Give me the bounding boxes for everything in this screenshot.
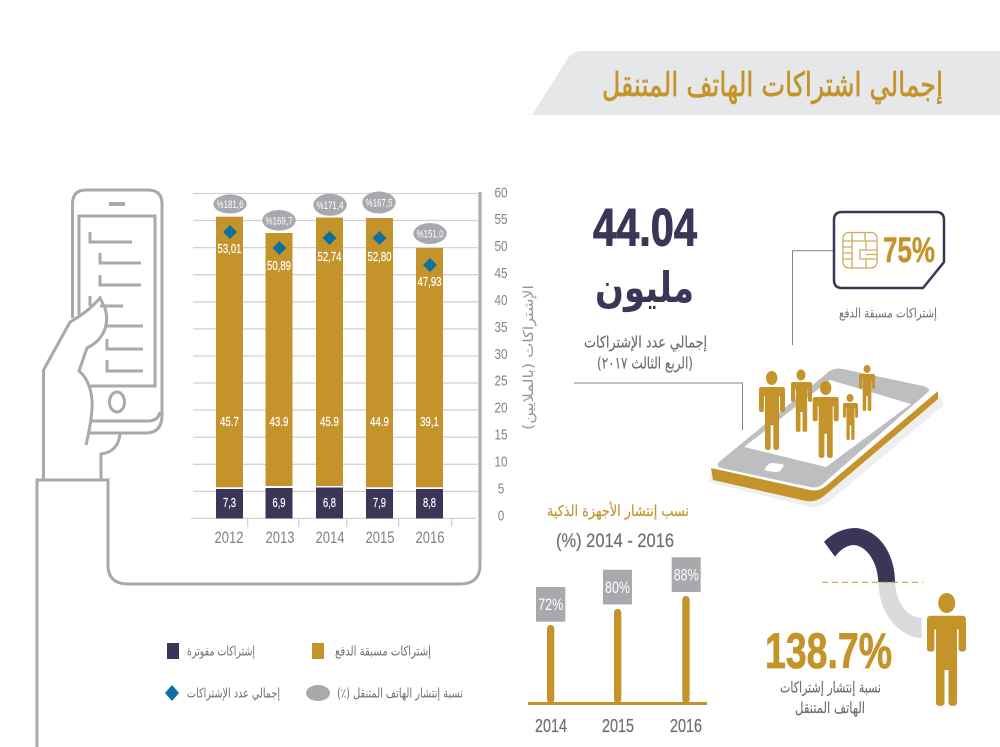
arc gauge bbox=[822, 528, 923, 638]
legend bbox=[165, 643, 463, 702]
total subscriptions figure: إجمالي عدد الإشتراكات bbox=[584, 332, 707, 352]
person bbox=[791, 370, 812, 432]
chart gridlines bbox=[191, 194, 478, 527]
bar values: 53,01 bbox=[218, 242, 242, 256]
smart device penetration chart: 80% bbox=[605, 578, 630, 597]
penetration values: %167,5 bbox=[366, 198, 392, 210]
y axis numbers: 30 bbox=[494, 346, 508, 363]
person bbox=[759, 371, 785, 450]
x axis years: 2015 bbox=[366, 529, 394, 547]
person bbox=[843, 394, 858, 440]
connector lines bbox=[574, 251, 833, 430]
legend: إشتراكات مفوترة bbox=[187, 644, 255, 660]
y axis numbers: 35 bbox=[494, 319, 508, 336]
total subscriptions figure bbox=[584, 199, 707, 374]
bar values: 45.9 bbox=[320, 415, 339, 429]
bar values: 39,1 bbox=[420, 415, 439, 429]
penetration values: %181,6 bbox=[216, 199, 244, 211]
y axis numbers: 15 bbox=[494, 427, 508, 444]
bar values: 50,89 bbox=[267, 259, 291, 273]
total subscriptions figure: 44.04 bbox=[593, 199, 697, 258]
smart device penetration chart bbox=[528, 501, 707, 736]
years bbox=[535, 716, 702, 736]
stacked bar chart bbox=[191, 184, 537, 547]
mobile penetration figure: 138.7% bbox=[765, 623, 892, 679]
icon: hand holding phone with frame bbox=[37, 190, 480, 747]
penetration values: %171,4 bbox=[316, 200, 344, 212]
total subscriptions figure: مليون bbox=[595, 263, 694, 313]
y axis numbers: 40 bbox=[494, 292, 508, 309]
total subscriptions figure: (الربع الثالث ٢٠١٧) bbox=[597, 354, 693, 374]
icon: sim chip bbox=[843, 232, 877, 268]
legend: إجمالي عدد الإشتراكات bbox=[187, 686, 280, 702]
y axis numbers: 25 bbox=[494, 373, 508, 390]
years: 2014 bbox=[535, 716, 567, 736]
smart device penetration chart: 88% bbox=[674, 566, 699, 584]
postpaid bars bbox=[216, 488, 443, 518]
icon: person bbox=[927, 593, 966, 706]
bar values: 52,74 bbox=[318, 250, 342, 264]
legend: إشتراكات مسبقة الدفع bbox=[335, 644, 431, 660]
bar values: 47,93 bbox=[418, 275, 442, 289]
title banner bbox=[532, 51, 1000, 115]
smart device penetration chart: نسب إنتشار الأجهزة الذكية bbox=[547, 501, 689, 520]
mobile penetration figure: نسبة إنتشار إشتراكات bbox=[780, 678, 881, 696]
mobile penetration figure: الهاتف المتنقل bbox=[795, 699, 865, 717]
y axis numbers bbox=[494, 184, 508, 524]
bar values: 44.9 bbox=[370, 415, 389, 429]
bar values: 8,8 bbox=[423, 496, 436, 510]
smart device penetration chart: 72% bbox=[538, 595, 563, 614]
sim card callout: 75% bbox=[883, 231, 935, 270]
bar values: 7,9 bbox=[373, 496, 386, 510]
person bbox=[859, 365, 875, 411]
sim outline bbox=[834, 212, 944, 288]
prepaid bars bbox=[216, 217, 443, 487]
bar values: 7,3 bbox=[223, 496, 236, 510]
penetration ellipses bbox=[213, 192, 447, 244]
years: 2016 bbox=[670, 716, 702, 736]
y axis numbers: 45 bbox=[494, 265, 508, 282]
penetration values: %169,7 bbox=[266, 215, 292, 227]
y axis numbers: 10 bbox=[494, 454, 508, 470]
years: 2015 bbox=[602, 716, 634, 736]
value boxes bbox=[536, 557, 701, 622]
penetration values bbox=[216, 198, 444, 240]
bar values: 43.9 bbox=[270, 415, 289, 429]
x axis years: 2013 bbox=[266, 529, 294, 547]
sim card callout bbox=[834, 212, 944, 322]
sim card callout: إشتراكات مسبقة الدفع bbox=[839, 306, 937, 322]
bar values: 6,8 bbox=[323, 496, 336, 510]
x axis years bbox=[214, 529, 444, 547]
y axis numbers: 5 bbox=[498, 480, 504, 497]
mobile penetration figure bbox=[765, 528, 966, 717]
lollipop bars bbox=[528, 596, 707, 705]
total diamonds bbox=[223, 225, 437, 272]
bar values bbox=[218, 242, 442, 510]
y axis title: الإشتراكات (بالملايين) bbox=[521, 285, 537, 430]
icon: phone with people bbox=[708, 365, 944, 507]
x axis years: 2012 bbox=[214, 529, 244, 547]
x axis years: 2014 bbox=[316, 529, 344, 547]
smart device penetration chart: (%) 2014 - 2016 bbox=[556, 531, 674, 552]
y axis numbers: 55 bbox=[494, 211, 508, 228]
person bbox=[813, 381, 839, 458]
bar values: 45.7 bbox=[220, 415, 239, 429]
bar values: 52,80 bbox=[368, 250, 392, 264]
y axis numbers: 60 bbox=[494, 184, 508, 201]
bar values: 6,9 bbox=[272, 496, 286, 510]
x axis years: 2016 bbox=[416, 529, 444, 547]
legend: نسبة إنتشار الهاتف المتنقل (٪) bbox=[337, 686, 463, 702]
penetration values: %151,0 bbox=[416, 228, 444, 240]
y axis numbers: 20 bbox=[494, 400, 508, 417]
y axis numbers: 50 bbox=[494, 238, 508, 255]
y axis numbers: 0 bbox=[498, 507, 504, 524]
